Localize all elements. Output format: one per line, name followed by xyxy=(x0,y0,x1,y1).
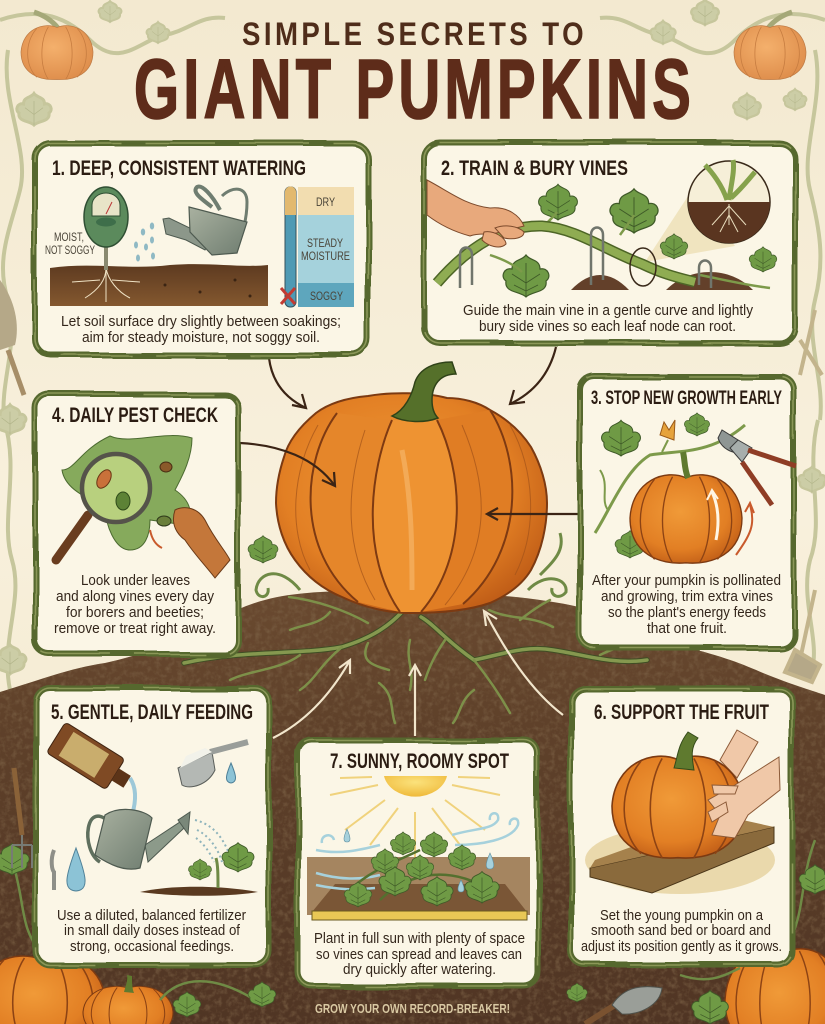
body text 2 xyxy=(463,302,753,335)
watering can xyxy=(88,809,232,869)
measuring scoop xyxy=(178,742,248,787)
stray bug on leaf xyxy=(160,462,172,472)
body text 7: so vines can spread and leaves can xyxy=(316,946,522,963)
sand bed xyxy=(585,826,775,894)
body text 7: Plant in full sun with plenty of space xyxy=(314,930,525,947)
title xyxy=(134,16,695,136)
arrow: panel 7 to pumpkin xyxy=(409,665,421,736)
soil texture xyxy=(0,591,825,1024)
panel 7: sunny, roomy spot xyxy=(298,740,538,986)
heading 5: 5. GENTLE, DAILY FEEDING xyxy=(51,701,253,724)
far arm xyxy=(720,730,758,778)
vine staples xyxy=(460,228,711,288)
body text 3 xyxy=(592,572,781,637)
body text 2: Guide the main vine in a gentle curve and lightly xyxy=(463,302,753,319)
pouring stream xyxy=(130,778,135,815)
inset root detail xyxy=(688,160,770,243)
ground and mounds xyxy=(571,272,753,290)
garden fork, left xyxy=(12,768,32,868)
heading 2: 2. TRAIN & BURY VINES xyxy=(441,157,628,180)
panel 1: deep, consistent watering xyxy=(35,143,368,355)
wind swirls xyxy=(316,813,518,889)
panel 3: stop new growth early xyxy=(580,376,796,648)
body text 5 xyxy=(57,907,246,955)
footer tagline: GROW YOUR OWN RECORD-BREAKER! xyxy=(315,1001,510,1016)
moisture gauge xyxy=(281,186,354,307)
heading 7: 7. SUNNY, ROOMY SPOT xyxy=(330,750,509,773)
corner pumpkin: top left xyxy=(21,12,93,80)
panel 6: support the fruit xyxy=(571,688,792,965)
corner pumpkin: top right xyxy=(734,12,806,80)
growth arrows xyxy=(707,490,754,555)
panel 2: train and bury vines xyxy=(424,143,795,343)
moisture gauge: DRY xyxy=(316,195,335,209)
soil mound xyxy=(0,591,825,1024)
soil meter xyxy=(84,187,128,270)
hand xyxy=(427,180,524,247)
vine with leaves and flower xyxy=(595,413,745,558)
heading 1: 1. DEEP, CONSISTENT WATERING xyxy=(52,157,306,180)
tendrils and leaf beside pumpkin xyxy=(248,533,566,597)
bottom vines and leaves xyxy=(0,840,825,1024)
body text 4: Look under leaves xyxy=(81,572,190,589)
drop xyxy=(226,763,236,783)
body text 3: After your pumpkin is pollinated xyxy=(592,572,781,589)
supporting hand xyxy=(708,757,780,838)
fertilizer bottle xyxy=(46,722,137,797)
leaf xyxy=(62,436,192,550)
shears and spade, right edge xyxy=(785,310,822,682)
body text 4 xyxy=(54,572,216,637)
body text 6 xyxy=(581,907,782,955)
pruners xyxy=(718,430,796,505)
label: moist, not soggy: MOIST, xyxy=(54,230,84,244)
spoon xyxy=(52,850,54,890)
moisture gauge: SOGGY xyxy=(310,289,343,303)
moisture gauge: STEADY xyxy=(307,236,343,250)
roots and vines under the pumpkin xyxy=(184,597,660,723)
body text 1: Let soil surface dry slightly between soakings; xyxy=(61,313,341,330)
soil bed with roots xyxy=(50,264,268,306)
body text 7: dry quickly after watering. xyxy=(343,961,496,978)
sprawling vines xyxy=(344,832,499,907)
body text 5: strong, occasional feedings. xyxy=(70,938,234,955)
body text 6: Set the young pumpkin on a xyxy=(600,907,764,924)
body text 7 xyxy=(314,930,525,978)
magnifier xyxy=(56,454,150,560)
main vine xyxy=(437,226,695,283)
ruler xyxy=(312,911,527,920)
water drops xyxy=(134,222,155,262)
beam to inset xyxy=(645,190,735,262)
body text 1: aim for steady moisture, not soggy soil. xyxy=(82,329,320,346)
body text 3: that one fruit. xyxy=(647,620,727,637)
gloved hand xyxy=(150,508,230,578)
body text 6: adjust its position gently as it grows. xyxy=(581,938,782,955)
garden soil xyxy=(307,857,530,915)
bottom left pumpkins xyxy=(0,956,173,1024)
leaf node circle xyxy=(630,248,656,286)
arrow: panel 2 to pumpkin xyxy=(510,347,556,404)
panel 4: daily pest check xyxy=(35,394,238,654)
arrow: panel 1 to pumpkin xyxy=(269,358,306,408)
moisture gauge: MOISTURE xyxy=(301,249,350,263)
body text 5: in small daily doses instead of xyxy=(64,922,241,939)
trowel, left edge xyxy=(0,280,24,395)
title: SIMPLE SECRETS TO xyxy=(242,16,587,52)
body text 3: and growing, trim extra vines xyxy=(601,588,773,605)
watering can xyxy=(163,187,247,255)
label: moist, not soggy xyxy=(45,230,95,257)
pumpkin on board xyxy=(612,732,744,858)
small pumpkin xyxy=(630,452,742,563)
label: moist, not soggy: NOT SOGGY xyxy=(45,243,95,257)
arrow: panel 5 to pumpkin xyxy=(273,660,350,738)
body text 5: Use a diluted, balanced fertilizer xyxy=(57,907,246,924)
large drop xyxy=(67,848,85,891)
corner and side vines xyxy=(0,0,825,690)
water drops xyxy=(344,829,494,892)
seedling xyxy=(140,843,258,896)
panel 5: gentle, daily feeding xyxy=(36,688,269,965)
sun and rays xyxy=(330,776,500,860)
board xyxy=(590,815,774,893)
bottom right pumpkin xyxy=(725,949,825,1024)
heading 4: 4. DAILY PEST CHECK xyxy=(52,404,218,427)
body text 4: for borers and beeties; xyxy=(66,604,204,621)
arrow: panel 4 to pumpkin xyxy=(240,443,335,486)
main giant pumpkin xyxy=(276,362,547,613)
body text 6: smooth sand bed or board and xyxy=(591,922,771,939)
body text 2: bury side vines so each leaf node can root. xyxy=(479,318,736,335)
body text 3: so the plant's energy feeds xyxy=(608,604,766,621)
body text 1 xyxy=(61,313,341,346)
arrow: panel 6 to pumpkin xyxy=(484,611,563,715)
body text 4: remove or treat right away. xyxy=(54,620,216,637)
trowel bottom xyxy=(585,987,662,1024)
body text 4: and along vines every day xyxy=(56,588,214,605)
pumpkin stem xyxy=(392,362,456,422)
leaves xyxy=(490,184,777,297)
arrow: panel 3 to pumpkin xyxy=(487,508,580,520)
